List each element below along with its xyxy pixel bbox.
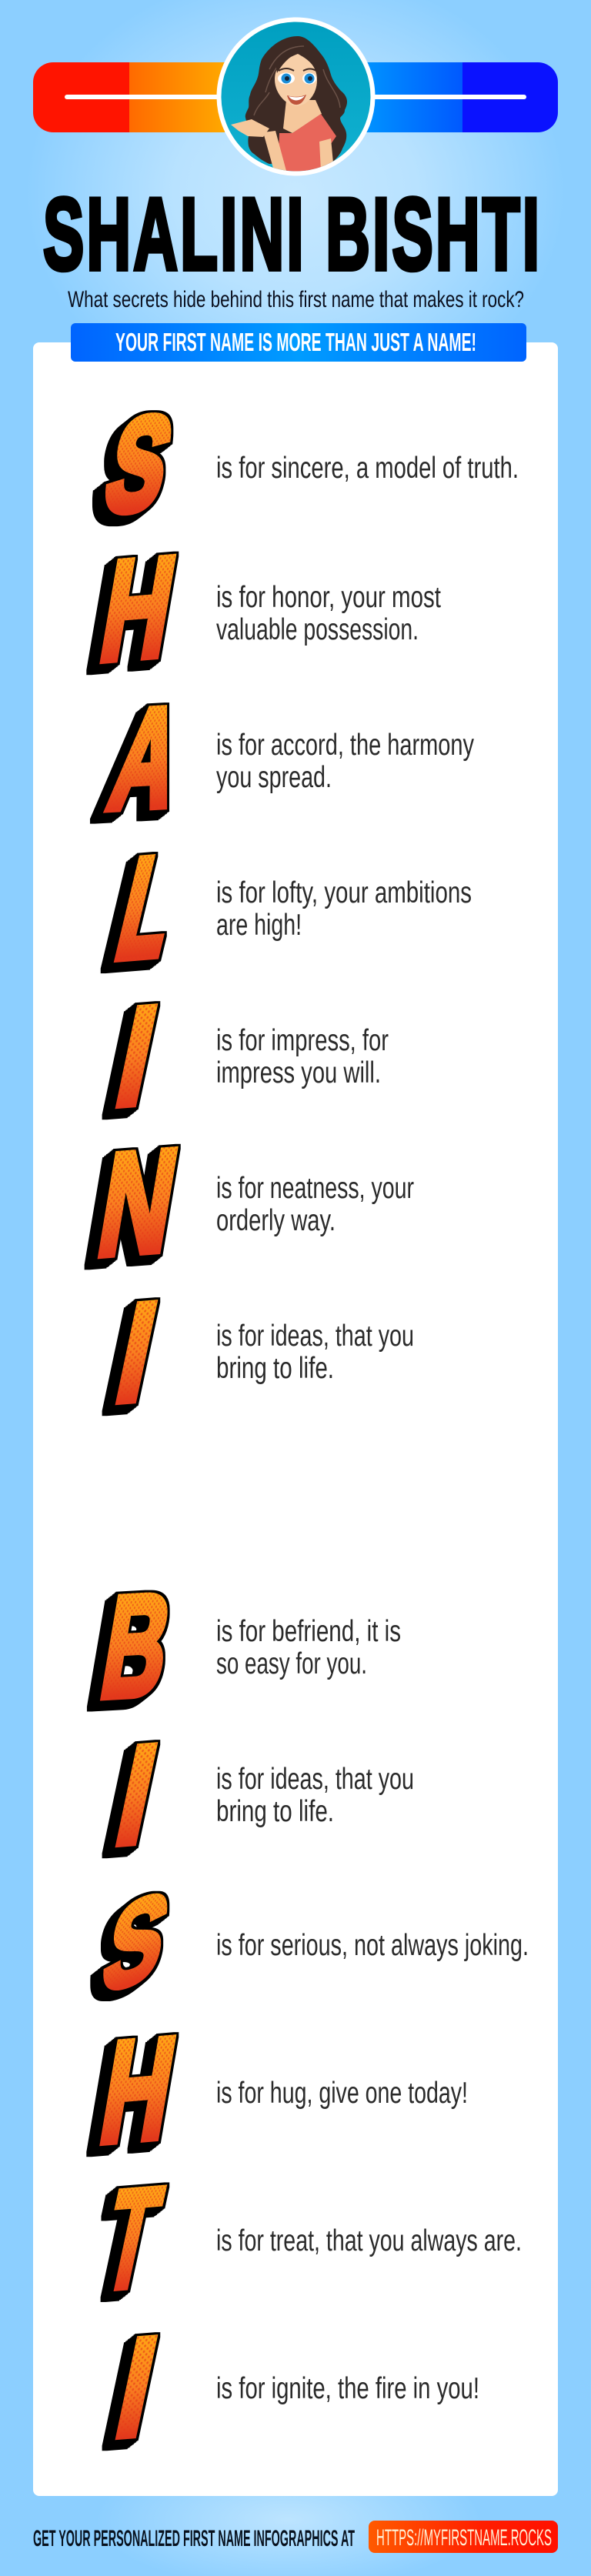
title: SHALINI BISHTI	[43, 178, 542, 292]
row: I ignite: is for ignite, the fire in you!	[216, 2372, 479, 2405]
row: I impress: is for impress, for	[216, 1024, 389, 1057]
row: H honor: H	[91, 526, 185, 692]
row: S serious: S	[93, 1864, 179, 2020]
row: L lofty: are high!	[216, 909, 302, 942]
row: B befriend: so easy for you.	[216, 1647, 367, 1680]
row: I impress	[102, 974, 389, 1139]
row: B befriend: B	[92, 1563, 182, 1729]
row: I impress: I	[102, 974, 170, 1139]
footer url button	[369, 2521, 558, 2553]
row: I ideas: is for ideas, that you	[216, 1320, 414, 1353]
row: H honor	[91, 526, 441, 692]
row: I ideas: bring to life.	[216, 1352, 334, 1385]
icon: cartoon woman portrait	[219, 20, 372, 175]
header colour bar	[33, 62, 558, 132]
row: N neatness: N	[88, 1118, 187, 1287]
row: I ideas second	[102, 1713, 414, 1877]
banner	[71, 323, 526, 362]
row: I ignite: I	[102, 2305, 170, 2470]
row: I ideas	[102, 1270, 414, 1435]
row: H hug	[91, 2007, 468, 2174]
row: S serious	[93, 1864, 529, 2020]
row: I ideas: I	[102, 1270, 170, 1435]
row: S sincere: S	[94, 389, 184, 541]
row: S sincere	[94, 389, 519, 541]
row: H hug: is for hug, give one today!	[216, 2077, 468, 2110]
row: N neatness: is for neatness, your	[216, 1172, 414, 1205]
row: I ideas second: is for ideas, that you	[216, 1763, 414, 1796]
row: L lofty: L	[105, 827, 190, 989]
row: N neatness: orderly way.	[216, 1204, 336, 1237]
row: A accord	[98, 677, 474, 839]
row: A accord: A	[98, 677, 195, 839]
row: L lofty	[105, 827, 472, 989]
row: T treat: T	[91, 2157, 172, 2321]
row: N neatness	[88, 1118, 414, 1287]
panel: white letters card	[33, 342, 558, 2496]
row: A accord: is for accord, the harmony	[216, 729, 474, 762]
row: T treat	[91, 2157, 522, 2321]
row: H honor: valuable possession.	[216, 613, 419, 646]
row: I ignite	[102, 2305, 479, 2470]
row: I impress: impress you will.	[216, 1056, 381, 1089]
row: H hug: H	[91, 2007, 185, 2174]
row: H honor: is for honor, your most	[216, 581, 441, 614]
row: I ideas second: I	[102, 1713, 170, 1877]
row: A accord: you spread.	[216, 761, 332, 794]
row: I ideas second: bring to life.	[216, 1795, 334, 1828]
row: B befriend: is for befriend, it is	[216, 1615, 401, 1648]
row: B befriend	[92, 1563, 401, 1729]
row: L lofty: is for lofty, your ambitions	[216, 876, 472, 909]
